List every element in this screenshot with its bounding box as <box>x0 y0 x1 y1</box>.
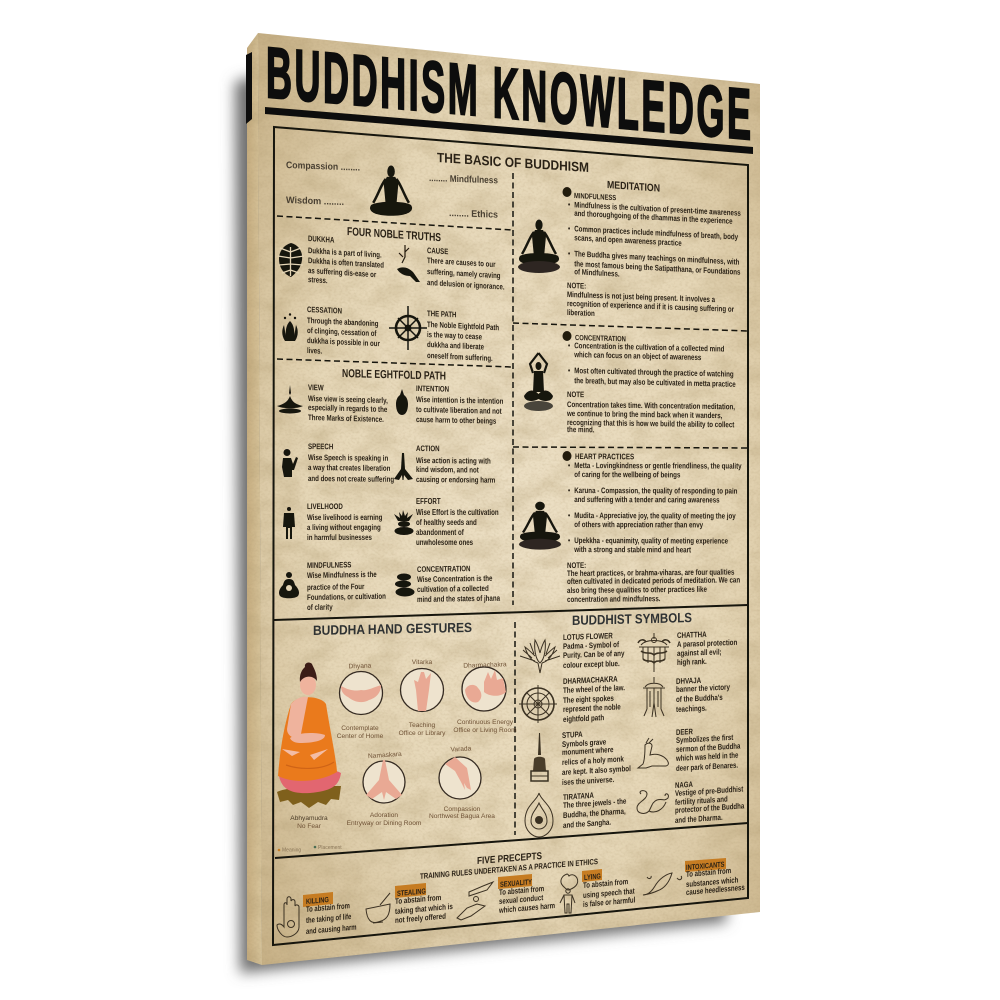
icon: speech figure <box>282 449 298 477</box>
text: intoxicants: substances which <box>686 876 738 889</box>
icon: Buddha head <box>396 389 408 415</box>
text: stealing: taking that which is <box>395 902 453 916</box>
text: intoxicants: cause heedlessness <box>686 883 745 897</box>
icon: deer <box>638 738 668 768</box>
text: livelihood: a living without engaging <box>307 523 381 532</box>
text: naga: protector of the Buddha <box>675 802 744 815</box>
text: mindfulness bullets: of Mindfulness. <box>574 268 620 279</box>
panel: Buddha hand gestures <box>277 620 517 854</box>
text: mindfulness: practice of the Four <box>307 582 365 592</box>
text: intoxicants <box>686 865 745 897</box>
subheading: TRAINING RULES UNDERTAKEN AS A PRACTICE IN ETHICS <box>420 857 599 881</box>
text: deer <box>675 725 740 773</box>
text: action: causing or endorsing harm <box>416 475 495 485</box>
caption: abhyamudra <box>290 815 328 830</box>
text: cessation: lives. <box>307 346 322 356</box>
text: mindfulness note: NOTE: <box>567 281 586 291</box>
label: ethics: ........ Ethics <box>449 208 498 221</box>
tag: stealing: STEALING <box>397 888 426 898</box>
gesture: vitarka <box>399 659 446 737</box>
text: the path <box>427 309 499 364</box>
icon: dharmachakra <box>519 685 557 723</box>
heading: noble eightfold path: NOBLE EGHTFOLD PATH <box>342 368 446 383</box>
text: heart practices bullets: of caring for the wellbeing of beings <box>574 470 680 480</box>
text: heart practices note: NOTE: <box>567 561 586 570</box>
title wrap on side edge <box>246 52 252 124</box>
text: mindfulness: Wise Mindfulness is the <box>307 570 377 580</box>
gesture: dharmachakra: Office or Living Room <box>453 727 517 734</box>
text: stupa: ises the universe. <box>562 775 614 787</box>
text: mindfulness bullets: Mindfulness is the cultivation of present-time awareness <box>574 201 741 218</box>
text: concentration bullets: which can focus on an object of awareness <box>573 350 701 362</box>
icon: giving hands <box>457 882 493 920</box>
text: cessation: dukkha is possible in our <box>307 336 380 349</box>
text: dhvaja <box>676 675 730 714</box>
text: mindfulness bullets: Common practices include mindfulness of breath, body <box>574 225 738 242</box>
text: concentration note <box>566 390 735 437</box>
text: the path: dukkha and liberate <box>427 340 484 352</box>
text: naga: fertility rituals and <box>675 795 728 807</box>
label: wisdom: Wisdom ........ <box>286 195 344 208</box>
text: heart practices bullets: and suffering with a tender and caring awareness <box>574 495 720 505</box>
text: view: VIEW <box>308 383 324 393</box>
gesture: varada <box>429 745 495 820</box>
icon: figure with balloons <box>560 874 578 913</box>
text: view: Three Marks of Existence. <box>308 413 384 424</box>
text: cause: and delusion or ignorance. <box>427 278 505 292</box>
tag: sexuality <box>498 874 532 889</box>
heading: five precepts: FIVE PRECEPTS <box>477 851 542 867</box>
text: speech: SPEECH <box>308 442 333 452</box>
icon: stupa <box>531 733 548 781</box>
text: lotus flower <box>563 631 624 670</box>
gesture: dhyana: Contemplate <box>341 725 379 732</box>
text: heart practices bullets: • <box>568 486 571 495</box>
text: stupa: relics of a holy monk <box>562 755 624 767</box>
gesture: varada: Compassion <box>444 806 481 813</box>
panel: basics of Buddhism <box>286 150 589 221</box>
text: mindfulness bullets <box>568 200 741 285</box>
icon: small meditator <box>279 572 299 598</box>
text: tiratana: The three jewels - the <box>563 797 626 810</box>
text: sexuality: sexual conduct <box>499 893 544 906</box>
text: concentration bullets: Concentration is the cultivation of a collected mind <box>574 341 724 354</box>
heading: four noble truths: FOUR NOBLE TRUTHS <box>347 226 441 244</box>
text: intention: INTENTION <box>416 384 449 394</box>
text: effort: unwholesome ones <box>416 538 473 547</box>
text: tiratana: Buddha, the Dharma, <box>563 807 626 820</box>
text: heart practices bullets: Mudita - Appreciative joy, the quality of meeting the joy <box>574 511 736 521</box>
text: speech: a way that creates liberation <box>308 463 390 473</box>
text: the path: THE PATH <box>427 309 456 320</box>
text: killing <box>306 902 357 936</box>
text: dhvaja: banner the victory <box>676 683 730 694</box>
text: mindfulness: of clarity <box>307 603 333 612</box>
text: concentration: CONCENTRATION <box>417 564 471 574</box>
panel: meditation <box>518 179 742 604</box>
text: stealing <box>395 892 453 925</box>
text: mindfulness label: MINDFULNESS <box>574 192 617 202</box>
text: mindfulness bullets: • <box>568 249 571 258</box>
icon: hand with eye <box>277 897 299 937</box>
legend <box>278 845 342 854</box>
text: heart practices label: HEART PRACTICES <box>575 452 634 462</box>
gesture: varada: Varada <box>450 745 472 754</box>
gesture: namaskara <box>347 751 422 827</box>
text: action: Wise action is acting with <box>416 456 491 466</box>
text: speech: Wise Speech is speaking in <box>308 453 388 463</box>
text: cessation: Through the abandoning <box>307 316 378 328</box>
text: dharmachakra: DHARMACHAKRA <box>563 675 618 686</box>
text: tiratana <box>563 789 626 830</box>
text: heart practices bullets: Karuna - Compassion, the quality of responding to pain <box>574 486 737 496</box>
text: dharmachakra: The wheel of the law. <box>563 683 625 695</box>
text: mindfulness <box>307 560 386 612</box>
text: intention: to cultivate liberation and not <box>416 405 502 416</box>
text: deer: deer park of Benares. <box>676 761 738 773</box>
text: dharmachakra: eightfold path <box>563 713 604 724</box>
text: cessation: of clinging, cessation of <box>307 326 377 338</box>
text: concentration: cultivation of a collected <box>417 584 489 594</box>
text: cause <box>427 246 505 292</box>
tag: killing: KILLING <box>306 896 329 906</box>
icon: mindfulness bullet <box>562 187 572 197</box>
label: compassion: Compassion ........ <box>286 160 360 174</box>
text: mindfulness bullets: and thoroughgoing of the dhammas in the experience <box>574 209 733 226</box>
text: killing: and causing harm <box>306 924 357 936</box>
gesture: dharmachakra <box>453 661 517 734</box>
text: dukkha <box>308 234 384 289</box>
text: cause: There are causes to our <box>427 256 496 269</box>
text: deer: Symbolizes the first <box>676 733 734 745</box>
tag: lying <box>582 869 602 882</box>
legend: Meaning <box>282 848 301 854</box>
icon: seated figure one <box>518 220 560 273</box>
text: deer: DEER <box>676 727 693 737</box>
text: dhvaja: teachings. <box>676 704 707 714</box>
icon: lotus on stones <box>394 510 414 535</box>
text: heart practices bullets: with a strong and stable mind and heart <box>573 545 692 555</box>
text: effort: Wise Effort is the cultivation <box>416 508 499 517</box>
text: killing: To abstain from <box>306 902 350 914</box>
text: naga: and the Dharma. <box>675 813 723 825</box>
text: stealing: not freely offered <box>395 912 446 925</box>
text: view: especially in regards to the <box>308 403 387 414</box>
text: heart practices bullets: of others with appreciation rather than envy <box>574 520 703 530</box>
text: speech <box>308 442 394 484</box>
text: heart practices bullets: • <box>568 536 571 545</box>
text: concentration bullets: Most often cultivated through the practice of watching <box>574 366 734 379</box>
text: mindfulness bullets: the most famous being the Satipatthana, or Foundations <box>574 260 740 277</box>
text: lying: is false or harmful <box>583 896 635 909</box>
text: heart practices bullets: Upekkha - equanimity, quality of meeting experience <box>574 536 728 546</box>
text: chattha: CHATTHA <box>677 630 707 640</box>
text: livelihood: Wise livelihood is earning <box>307 513 382 522</box>
text: dukkha: stress. <box>308 275 328 285</box>
text: mindfulness note: Mindfulness is not just being present. It involves a <box>567 290 716 304</box>
gesture: varada: Northwest Bagua Area <box>429 813 495 820</box>
heading: Buddhist symbols: BUDDHIST SYMBOLS <box>572 610 692 628</box>
gesture: dhyana <box>337 663 384 740</box>
text: dukkha: DUKKHA <box>308 234 334 245</box>
text: mindfulness: Foundations, or cultivation <box>307 592 386 602</box>
heading: the basic of Buddhism: THE BASIC OF BUDDHISM <box>437 150 589 175</box>
text: action: ACTION <box>416 444 440 453</box>
text: heart practices bullets: • <box>568 461 571 470</box>
text: mindfulness: MINDFULNESS <box>307 561 352 570</box>
icon: concentration bullet <box>562 331 572 341</box>
icon: praying hands <box>394 453 413 480</box>
text: stealing: To abstain from <box>395 893 441 906</box>
text: heart practices note: often cultivated in dedicated periods of meditation. We can <box>567 576 740 586</box>
text: chattha: against all evil; <box>677 648 722 658</box>
text: cause: suffering, namely craving <box>427 267 501 281</box>
text: heart practices note <box>567 560 740 604</box>
tag: killing <box>303 892 333 907</box>
text: intention: Wise intention is the intention <box>416 395 503 406</box>
tag: intoxicants: INTOXICANTS <box>686 861 725 872</box>
gesture: dharmachakra: Dharmachakra <box>463 661 507 670</box>
text: heart practices bullets: Metta - Lovingkindness or gentle friendliness, the quality <box>574 461 742 471</box>
icon: mortar and pestle <box>366 893 390 923</box>
canvas front paper <box>258 33 760 965</box>
text: concentration label: CONCENTRATION <box>575 334 626 344</box>
icon: heart bullet <box>562 451 572 461</box>
text: naga <box>675 777 744 825</box>
text: cessation <box>307 305 380 359</box>
icon: seated figure arms raised <box>524 353 553 411</box>
text: action <box>416 444 495 485</box>
text: mindfulness bullets: The Buddha gives many teachings on mindfulness, with <box>574 250 739 267</box>
text: stupa: monument where <box>562 745 614 757</box>
gesture: dhyana: Center of Home <box>337 733 384 740</box>
text: naga: Vestige of pre-Buddhist <box>675 785 744 798</box>
text: view <box>308 383 388 424</box>
tag: lying: LYING <box>584 873 601 882</box>
text: dhvaja: of the Buddha's <box>676 693 723 704</box>
text: lying: using speech that <box>583 887 635 900</box>
text: action: kind wisdom, and not <box>416 465 479 475</box>
text: dukkha: as suffering dis-ease or <box>308 266 376 280</box>
text: intention: cause harm to other beings <box>416 415 496 426</box>
text: tiratana: TIRATANA <box>563 791 594 802</box>
text: dharmachakra: represent the noble <box>563 703 621 714</box>
text: the path: oneself from suffering. <box>427 351 493 363</box>
text: lying: To abstain from <box>583 877 628 890</box>
icon: lotus <box>282 313 298 341</box>
heading: meditation: MEDITATION <box>607 179 660 195</box>
caption: abhyamudra: No Fear <box>297 823 322 830</box>
gesture: namaskara: Adoration <box>370 812 398 819</box>
text: effort: abandonment of <box>416 528 464 537</box>
title rule <box>265 107 753 154</box>
text: view: Wise view is seeing clearly, <box>308 394 388 405</box>
text: mindfulness note: recognition of experience and if it is causing suffering or <box>567 299 734 314</box>
text: mindfulness note <box>567 281 734 323</box>
text: chattha: A parasol protection <box>677 638 737 649</box>
label: mindfulness: ........ Mindfulness <box>429 173 498 186</box>
tag: sexuality: SEXUALITY <box>500 879 532 889</box>
icon: chattha <box>638 633 670 672</box>
text: livelihood <box>307 502 382 542</box>
text: heart practices bullets <box>568 461 742 555</box>
text: effort <box>416 497 499 547</box>
text: lotus flower: colour except blue. <box>563 659 620 670</box>
text: stupa: STUPA <box>562 730 583 740</box>
icon: lotus flower <box>520 640 560 673</box>
text: deer: which was held in the <box>675 751 738 763</box>
title: BUDDHISM KNOWLEDGE <box>266 33 751 156</box>
text: naga: NAGA <box>675 780 693 790</box>
text: concentration: Wise Concentration is the <box>417 574 492 584</box>
text: heart practices bullets: • <box>568 511 571 520</box>
text: concentration bullets <box>568 341 736 389</box>
text: concentration note: recognizing that this is how we build the ability to collect <box>567 418 735 430</box>
icon: naga <box>637 791 668 813</box>
text: concentration bullets: the breath, but may also be cultivated in metta practice <box>574 376 736 389</box>
text: heart practices note: also bring these qualities to other practices like <box>567 585 707 595</box>
text: intention <box>416 384 503 426</box>
text: the path: is the way to cease <box>427 330 482 342</box>
text: dukkha: Dukkha is a part of living. <box>308 246 382 260</box>
text: effort: EFFORT <box>416 497 441 506</box>
text: concentration note: NOTE <box>567 390 584 399</box>
gesture: dhyana: Dhyana <box>348 663 372 670</box>
text: dharmachakra: The eight spokes <box>563 694 614 705</box>
panel: five precepts <box>277 851 745 937</box>
icon: leaf <box>643 873 682 895</box>
icon: standing person <box>283 507 295 539</box>
text: mindfulness bullets: • <box>568 224 571 233</box>
text: concentration note: the mind. <box>567 425 595 435</box>
canvas side edge <box>247 33 262 965</box>
text: heart practices note: The heart practices, or brahma-viharas, are four qualities <box>567 568 734 578</box>
icon: dharma wheel <box>389 306 427 350</box>
text: stupa: Symbols grave <box>562 738 606 749</box>
heading: hand gestures: BUDDHA HAND GESTURES <box>313 620 472 638</box>
text: mindfulness bullets: • <box>568 200 571 209</box>
text: sexuality <box>498 883 555 915</box>
panel: Buddhist symbols <box>519 610 744 837</box>
icon: meditating figure <box>370 166 412 216</box>
illustration: seated Buddha <box>277 663 341 808</box>
text: livelihood: in harmful businesses <box>307 533 372 542</box>
text: concentration bullets: • <box>568 341 571 350</box>
text: the path: The Noble Eightfold Path <box>427 320 499 333</box>
text: cessation: CESSATION <box>307 305 342 316</box>
tag: stealing <box>395 883 426 898</box>
text: concentration note: Concentration takes time. With concentration meditation, <box>567 400 735 412</box>
text: chattha: high rank. <box>677 657 707 667</box>
text: livelihood: LIVELHOOD <box>307 502 343 511</box>
text: killing: the taking of life <box>306 913 351 925</box>
text: stupa: are kept. It also symbol <box>562 764 631 777</box>
paper texture <box>245 30 763 970</box>
gesture: dharmachakra: Continuous Energy <box>457 719 514 726</box>
text: lotus flower: Purity. Can be of any <box>563 649 624 660</box>
text: heart practices note: concentration and mindfulness. <box>567 594 661 604</box>
text: lotus flower: LOTUS FLOWER <box>563 632 614 642</box>
text: sexuality: which causes harm <box>498 901 555 915</box>
outer frame <box>273 127 748 945</box>
icon: triratna <box>525 793 553 837</box>
icon: monstera leaf <box>278 243 304 277</box>
text: intoxicants: To abstain from <box>686 866 731 879</box>
gesture: vitarka: Vitarka <box>412 659 433 666</box>
text: cause: CAUSE <box>427 246 448 257</box>
icon: sprout in hand <box>397 245 420 282</box>
text: mindfulness bullets: scans, and open awareness practice <box>574 234 682 248</box>
panel: noble eightfold path <box>277 368 503 612</box>
text: chattha <box>677 629 737 667</box>
icon: water drop <box>277 385 303 414</box>
gesture: namaskara: Namaskara <box>368 751 402 760</box>
text: concentration: mind and the states of jhana <box>417 594 501 604</box>
text: lying <box>583 877 635 909</box>
text: concentration bullets: • <box>568 366 571 375</box>
gesture: vitarka: Office or Library <box>399 730 446 737</box>
gesture: namaskara: Entryway or Dining Room <box>347 820 422 827</box>
legend: Placement <box>318 845 342 851</box>
icon: stacked stones <box>395 574 414 596</box>
panel dividers <box>274 173 748 858</box>
gesture: vitarka: Teaching <box>409 722 436 729</box>
caption: abhyamudra: Abhyamudra <box>290 815 328 822</box>
text: dharmachakra <box>563 674 625 724</box>
text: dhvaja: DHVAJA <box>676 676 701 686</box>
text: dukkha: Dukkha is often translated <box>308 256 384 270</box>
text: concentration <box>417 564 501 604</box>
text: concentration note: we continue to bring the mind back when it wanders, <box>566 409 722 420</box>
text: stupa <box>562 727 631 787</box>
text: effort: of healthy seeds and <box>416 518 477 527</box>
text: lotus flower: Padma - Symbol of <box>563 640 620 651</box>
text: sexuality: To abstain from <box>499 884 544 897</box>
canvas drop shadow <box>235 76 727 973</box>
icon: seated figure three <box>519 502 561 550</box>
text: deer: sermon of the Buddha <box>676 742 740 754</box>
panel: four noble truths <box>278 226 505 364</box>
text: tiratana: and the Sangha. <box>563 818 611 830</box>
text: mindfulness note: liberation <box>567 308 595 318</box>
icon: dhvaja <box>643 677 665 717</box>
text: speech: and does not create suffering <box>308 474 394 484</box>
